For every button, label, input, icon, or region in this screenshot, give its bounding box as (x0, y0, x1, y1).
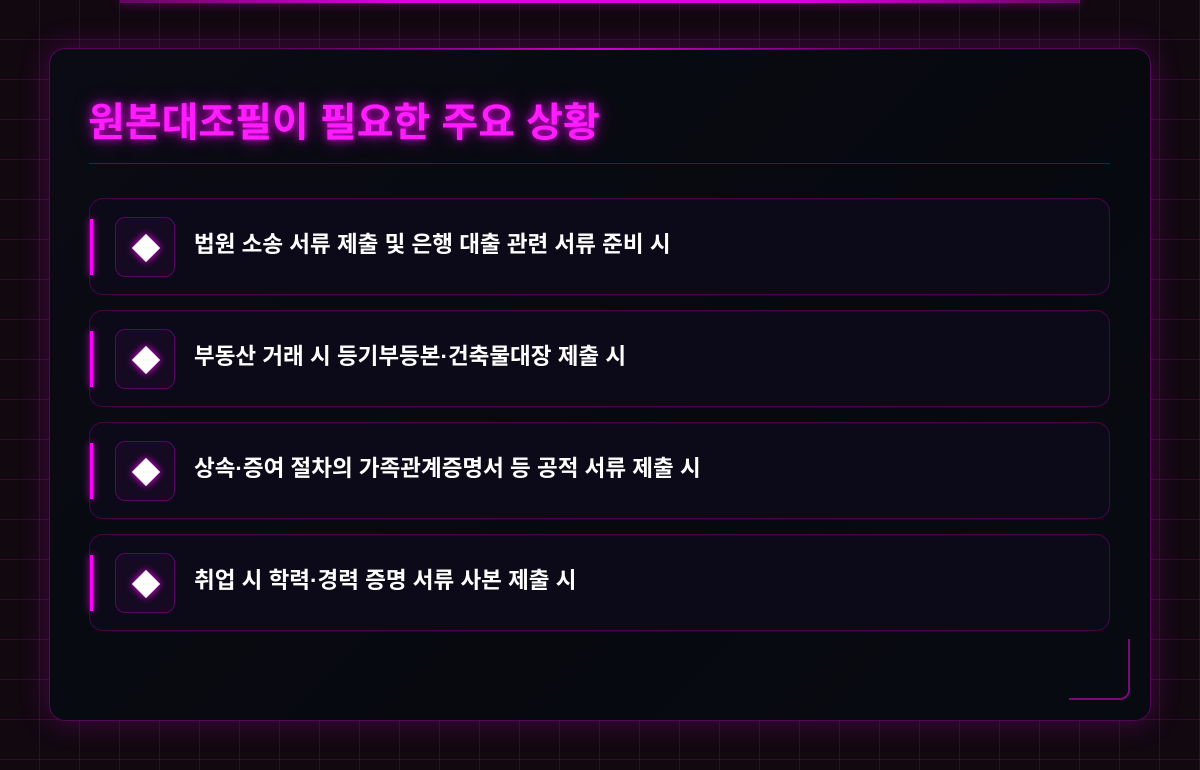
text: item 3: 상속·증여 절차의 가족관계증명서 등 공적 서류 제출 시 (194, 456, 701, 481)
item 1 (89, 198, 1110, 295)
item 3 (89, 422, 1110, 519)
icon: diamond (115, 441, 175, 501)
item 4 (89, 534, 1110, 631)
text: item 2: 부동산 거래 시 등기부등본·건축물대장 제출 시 (194, 344, 626, 369)
text: item 4: 취업 시 학력·경력 증명 서류 사본 제출 시 (194, 568, 576, 593)
icon: diamond (115, 329, 175, 389)
item 2 (89, 310, 1110, 407)
icon: diamond (115, 553, 175, 613)
text: item 1: 법원 소송 서류 제출 및 은행 대출 관련 서류 준비 시 (194, 232, 671, 257)
icon: diamond (115, 217, 175, 277)
title: 원본대조필이 필요한 주요 상황 (88, 101, 600, 145)
decorative corner bracket (1069, 639, 1130, 700)
